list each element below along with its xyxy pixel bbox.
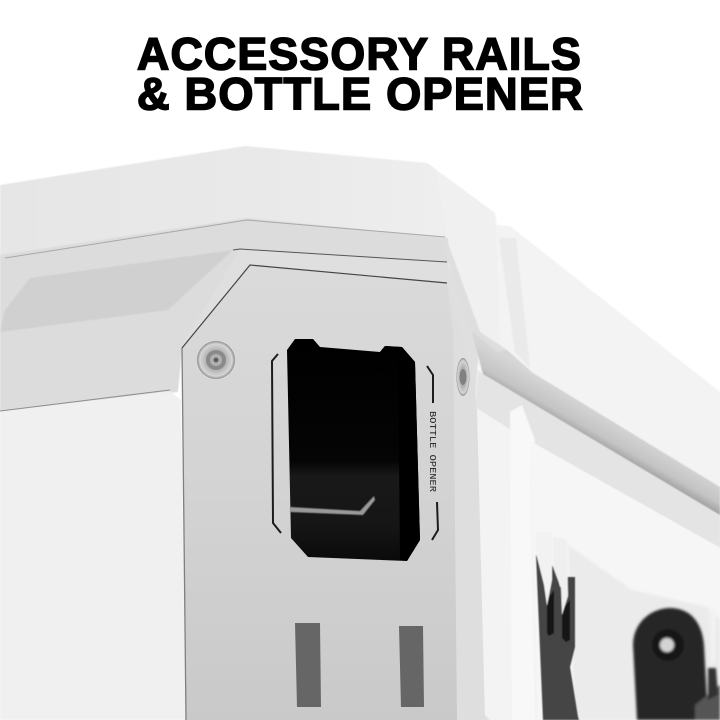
panel surround band (182, 249, 490, 720)
metal panel (182, 265, 457, 720)
lower body front (470, 395, 720, 720)
rail slots (295, 623, 424, 707)
left screw (197, 341, 235, 379)
white front recess (530, 441, 720, 720)
bottle opener window (287, 339, 420, 561)
accessory rail (440, 237, 720, 720)
opener brackets (272, 354, 438, 540)
lid top face (0, 146, 448, 260)
engraved label: BOTTLE OPENER (427, 411, 438, 492)
fork latch (536, 532, 579, 720)
title (137, 28, 584, 120)
rubber latch knob (633, 608, 720, 720)
right screw (456, 358, 470, 396)
lid right face (427, 163, 720, 520)
title: & BOTTLE OPENER (137, 68, 584, 120)
left handle recess and bands (0, 218, 448, 720)
cooler illustration (0, 146, 720, 720)
title: ACCESSORY RAILS (137, 28, 582, 80)
